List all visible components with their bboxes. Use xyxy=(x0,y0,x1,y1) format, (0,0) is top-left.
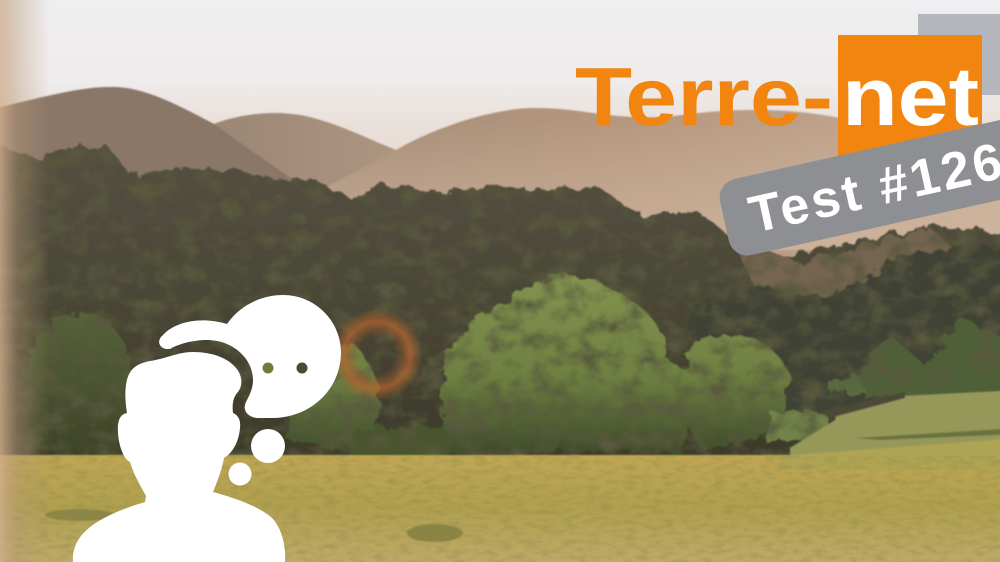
lens flare xyxy=(331,309,423,401)
background: sky xyxy=(0,0,1000,320)
bubble dot: left xyxy=(262,362,274,374)
logo: Terre-net wordmark: net xyxy=(842,50,979,143)
logo: Terre-net wordmark xyxy=(575,50,979,143)
background: meadow xyxy=(0,390,1000,562)
thought circle: large xyxy=(251,429,285,463)
background: bushes and trees xyxy=(0,272,1000,460)
background: grass texture xyxy=(0,456,1000,562)
background: mountains xyxy=(0,87,1000,320)
logo: Terre-net wordmark: Terre- xyxy=(575,50,833,143)
logo: grey square xyxy=(918,14,1000,95)
bubble dot: right xyxy=(296,362,308,374)
thought circle: small xyxy=(228,462,252,486)
icon: thinking person xyxy=(73,295,341,562)
background: forest xyxy=(0,136,1000,480)
badge: Test #126 xyxy=(716,108,1000,259)
background: warm left edge xyxy=(0,0,50,562)
thought bubble xyxy=(159,295,341,418)
person silhouette xyxy=(73,352,285,562)
logo: orange square xyxy=(838,35,982,157)
